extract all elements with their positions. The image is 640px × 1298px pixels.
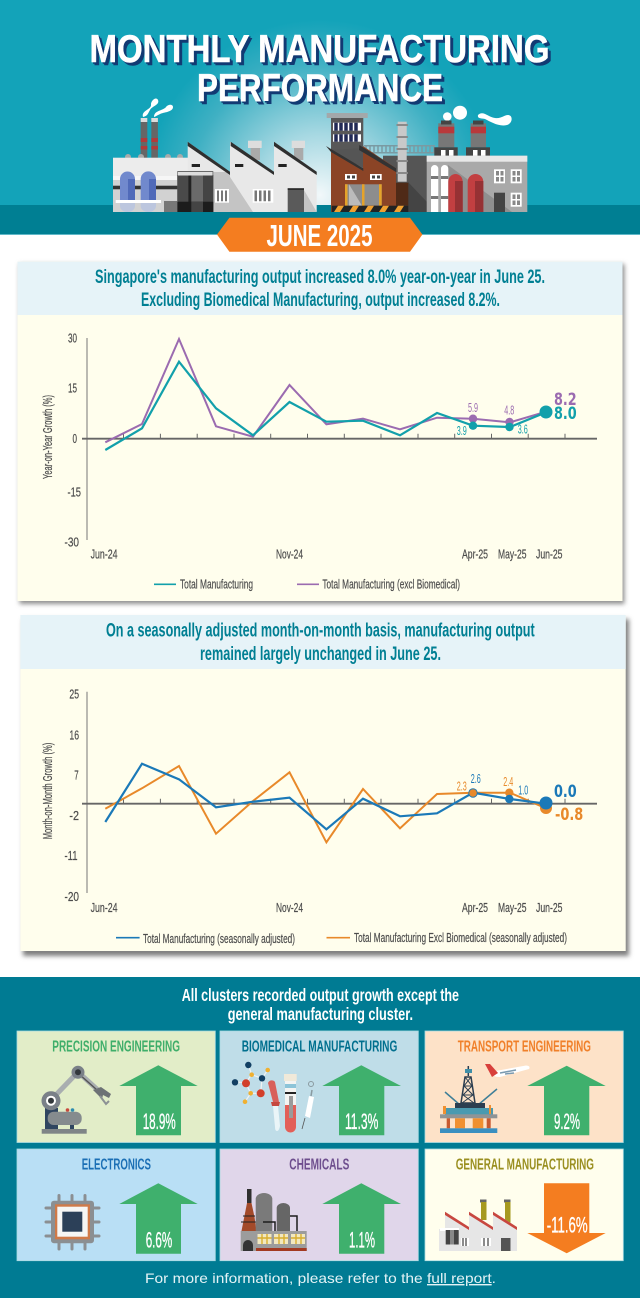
line chart: year-on-year: Jun-25: [536, 548, 563, 562]
title: MONTHLY MANUFACTURING: [91, 30, 551, 72]
line chart: year-on-year: 5.9: [468, 400, 478, 415]
title: MONTHLY MANUFACTURING: [92, 31, 552, 74]
line chart: month-on-month: 16: [69, 728, 79, 742]
line chart: year-on-year: Jun-24: [91, 548, 118, 562]
line chart: year-on-year: [41, 332, 597, 562]
line chart: year-on-year: 3.9: [457, 423, 467, 438]
heading: month-on-month: [106, 621, 535, 665]
legend: year-on-year: Total Manufacturing: [180, 578, 253, 592]
arrow: 9.2% up: [527, 1066, 606, 1135]
heading: clusters: [182, 985, 459, 1024]
heading: month-on-month: remained largely unchanged in June 25.: [200, 644, 441, 665]
line chart: year-on-year: Nov-24: [276, 548, 303, 562]
heading: year-on-year: [95, 267, 545, 311]
icon: chemical plant: [241, 1189, 307, 1251]
line chart: month-on-month: -2: [69, 809, 79, 823]
line chart: month-on-month: 0.0: [554, 782, 577, 802]
card: general manufacturing: [425, 1149, 623, 1261]
arrow: 11.3% up: [322, 1065, 401, 1135]
arrow: -11.6% down: [527, 1183, 606, 1253]
panel: year-on-year growth: [18, 262, 624, 604]
card: precision engineering: [17, 1031, 215, 1142]
line chart: month-on-month: 2.3: [457, 778, 467, 794]
line chart: month-on-month: -0.8: [555, 805, 583, 825]
card: precision engineering: PRECISION ENGINEERING: [52, 1039, 180, 1056]
header background: [0, 0, 640, 235]
footer note: For more information, please refer to the full report .: [145, 1270, 496, 1286]
legend: month-on-month: [116, 931, 567, 946]
arrow: 18.9% up: 18.9%: [143, 1109, 176, 1134]
legend: year-on-year: Total Manufacturing (excl Biomedical): [322, 578, 460, 592]
line chart: month-on-month: 2.6: [471, 771, 481, 786]
line chart: month-on-month: -11: [64, 849, 78, 863]
line chart: month-on-month: 1.0: [518, 782, 528, 798]
icon: lab equipment: [232, 1062, 314, 1133]
card: electronics: ELECTRONICS: [82, 1156, 151, 1173]
line chart: year-on-year: -15: [68, 486, 81, 500]
arrow: 9.2% up: 9.2%: [554, 1109, 580, 1134]
line chart: year-on-year: 0: [72, 432, 77, 446]
icon: left factory: [113, 99, 317, 212]
arrow: 6.6% up: 6.6%: [146, 1227, 172, 1252]
line chart: year-on-year: -30: [64, 536, 79, 550]
line chart: month-on-month: Apr-25: [462, 901, 488, 915]
arrow: 6.6% up: [119, 1183, 198, 1254]
arrow: -11.6% down: -11.6%: [547, 1212, 588, 1237]
arrow: 1.1% up: [322, 1183, 401, 1254]
line chart: year-on-year: 15: [68, 382, 77, 396]
line chart: year-on-year: Year-on-Year Growth (%): [41, 395, 55, 479]
line chart: month-on-month: 2.4: [503, 774, 513, 789]
line chart: year-on-year: 30: [68, 332, 77, 346]
title: [90, 28, 552, 113]
title: MONTHLY MANUFACTURING: [90, 28, 550, 71]
line chart: year-on-year: 8.2: [554, 390, 577, 410]
card: biomedical manufacturing: BIOMEDICAL MANUFACTURING: [242, 1039, 397, 1056]
card: electronics: [17, 1149, 215, 1261]
panel: month-on-month growth: [20, 615, 629, 956]
icon: right factory: [326, 106, 527, 212]
arrow: 11.3% up: 11.3%: [345, 1109, 378, 1134]
card: biomedical manufacturing: [220, 1031, 418, 1142]
line chart: month-on-month: 7: [74, 768, 79, 782]
title: PERFORMANCE: [200, 70, 446, 113]
line chart: month-on-month: Jun-25: [536, 901, 563, 915]
legend: year-on-year: [154, 578, 460, 592]
arrow: 1.1% up: 1.1%: [349, 1227, 375, 1252]
icon: general factory: [439, 1200, 517, 1251]
line chart: month-on-month: May-25: [498, 901, 527, 915]
line chart: month-on-month: -20: [64, 890, 79, 904]
line chart: year-on-year: 8.0: [554, 404, 577, 424]
card: chemicals: [220, 1149, 418, 1261]
legend: month-on-month: Total Manufacturing (seasonally adjusted): [143, 932, 295, 946]
line chart: year-on-year: 3.6: [518, 422, 528, 436]
title: PERFORMANCE: [197, 67, 443, 110]
icon: microchip: [46, 1196, 99, 1249]
line chart: year-on-year: Apr-25: [462, 548, 488, 562]
title: PERFORMANCE: [198, 68, 444, 112]
line chart: month-on-month: [41, 688, 597, 915]
month banner: JUNE 2025: [266, 218, 372, 253]
line chart: month-on-month: Month-on-Month Growth (%): [41, 743, 55, 839]
arrow: 18.9% up: [119, 1065, 198, 1135]
heading: clusters: All clusters recorded output growth except the: [182, 985, 459, 1005]
line chart: month-on-month: Nov-24: [276, 901, 303, 915]
card: transport engineering: [425, 1031, 623, 1142]
line chart: month-on-month: 25: [69, 688, 79, 702]
heading: clusters: general manufacturing cluster.: [228, 1004, 413, 1024]
line chart: year-on-year: May-25: [498, 548, 527, 562]
line chart: year-on-year: 4.8: [504, 402, 514, 418]
line chart: month-on-month: Jun-24: [91, 901, 118, 915]
icon: robot arm: [42, 1066, 111, 1134]
icon: oil rig and plane: [440, 1064, 530, 1133]
panel: clusters: [0, 977, 640, 1298]
card: chemicals: CHEMICALS: [289, 1156, 349, 1173]
